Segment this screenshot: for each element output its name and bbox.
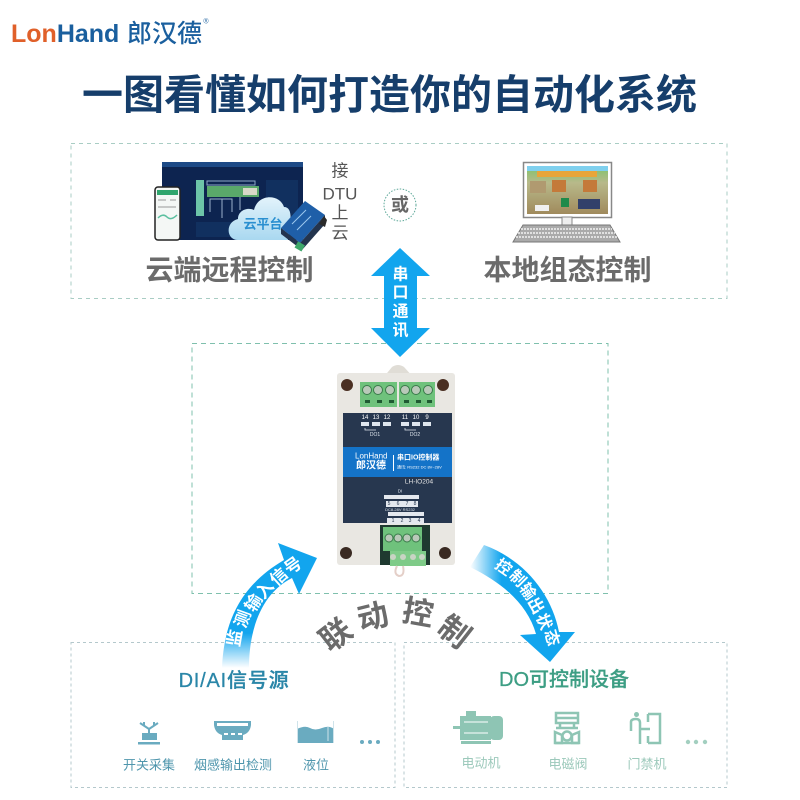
front panel: DI bbox=[398, 488, 402, 494]
bottom terminals bbox=[380, 525, 430, 576]
arrow: control output status: 态 bbox=[541, 628, 563, 648]
label: access control: 门禁机 bbox=[627, 756, 667, 772]
label: solenoid valve: 电磁阀 bbox=[548, 756, 588, 772]
front panel: LonHand bbox=[355, 452, 387, 460]
front panel: 9 bbox=[425, 415, 429, 421]
icon: cloud platform bbox=[155, 162, 327, 251]
arrow: control output status: 状 bbox=[532, 611, 555, 633]
more dots bbox=[686, 740, 707, 744]
label: motor: 电动机 bbox=[461, 756, 501, 770]
label: local control: 本地组态控制 bbox=[483, 254, 652, 286]
text: connect DTU to cloud bbox=[323, 162, 357, 242]
arrow: monitor input signal bbox=[222, 543, 317, 668]
arrow: monitor input signal: 监 bbox=[224, 628, 246, 648]
label: switch acquisition: 开关采集 bbox=[123, 758, 175, 772]
arrow: monitor input signal: 入 bbox=[252, 577, 278, 603]
front panel: 12 bbox=[384, 415, 391, 421]
arrow: control output status: 控 bbox=[492, 555, 516, 580]
front panel: 2 bbox=[401, 518, 404, 524]
label: smoke detector output: 烟感输出检测 bbox=[194, 758, 272, 772]
front panel: 8 bbox=[414, 501, 417, 507]
front panel: 6 bbox=[397, 501, 400, 507]
front panel: LH-IO204 bbox=[405, 478, 433, 486]
icon: solenoid valve bbox=[555, 713, 579, 743]
text: connect DTU to cloud: 云 bbox=[332, 224, 348, 242]
heading: controllable devices: DO可控制设备 bbox=[499, 668, 629, 691]
arrow: control output status bbox=[470, 545, 575, 662]
logo bbox=[11, 18, 209, 48]
label: cloud control: 云端远程控制 bbox=[145, 254, 314, 286]
heading: linked control: 制 bbox=[431, 609, 477, 655]
front panel: 7 bbox=[406, 501, 409, 507]
front panel: 13 bbox=[373, 415, 380, 421]
logo: ® bbox=[203, 18, 209, 26]
icon: access gate bbox=[631, 712, 660, 744]
arrow: control output status: 出 bbox=[524, 594, 547, 617]
front panel: 串口IO控制器 bbox=[397, 452, 439, 462]
heading: linked control: 联 bbox=[313, 612, 359, 658]
heading: signal sources: DI/AI信号源 bbox=[179, 669, 289, 692]
icon: motor bbox=[453, 711, 503, 744]
arrow: serial communication bbox=[371, 248, 430, 357]
badge: or bbox=[384, 189, 416, 221]
front panel: 郎汉德 bbox=[356, 458, 386, 472]
icon: switch acquisition bbox=[138, 722, 160, 744]
panel: controller frame bbox=[192, 344, 608, 594]
arrow: serial communication: 讯 bbox=[392, 322, 409, 340]
front panel: DO1 bbox=[370, 432, 380, 438]
front panel: 14 bbox=[362, 415, 369, 421]
top terminals bbox=[360, 382, 435, 407]
arrow: serial communication: 串 bbox=[392, 266, 409, 284]
arrow: control output status: 制 bbox=[505, 567, 529, 591]
front panel bbox=[343, 413, 452, 524]
device: serial IO controller bbox=[337, 365, 455, 576]
front panel: DO2 bbox=[410, 432, 420, 438]
panel: control options bbox=[71, 144, 727, 298]
badge: or: 或 bbox=[391, 194, 409, 215]
logo: LonHand bbox=[11, 20, 119, 48]
front panel: 10 bbox=[413, 415, 420, 421]
front panel: DC8-28V RS232 bbox=[385, 507, 416, 512]
icon: liquid level bbox=[297, 721, 334, 743]
front panel: 11 bbox=[402, 415, 409, 421]
panel: DO controllable devices bbox=[404, 642, 727, 788]
arrow: monitor input signal: 号 bbox=[281, 553, 305, 579]
heading: linked control: 控 bbox=[400, 593, 436, 633]
title: 一图看懂如何打造你的自动化系统 bbox=[82, 72, 697, 118]
arrow: control output status: 输 bbox=[515, 579, 540, 603]
arrow: monitor input signal: 输 bbox=[241, 590, 267, 615]
icon: smoke detector bbox=[214, 721, 251, 740]
front panel: 1 bbox=[392, 518, 395, 524]
heading: linked control bbox=[313, 593, 477, 658]
arrow: serial communication: 通 bbox=[392, 302, 409, 320]
icon: local computer bbox=[513, 162, 620, 242]
heading: linked control: 动 bbox=[354, 596, 392, 638]
logo: 郎汉德 bbox=[127, 20, 202, 48]
text: connect DTU to cloud: DTU bbox=[323, 184, 357, 204]
front panel: 3 bbox=[409, 518, 412, 524]
text: connect DTU to cloud: 上 bbox=[332, 204, 348, 222]
front panel: 4 bbox=[418, 518, 421, 524]
arrow: monitor input signal: 信 bbox=[266, 564, 292, 590]
arrow: serial communication: 口 bbox=[392, 284, 409, 302]
panel: DI/AI signal sources bbox=[71, 642, 395, 788]
front panel: 通讯: RS232 DC 8V~28V bbox=[397, 464, 442, 470]
front panel: 5 bbox=[388, 501, 391, 507]
more dots bbox=[360, 740, 380, 744]
text: connect DTU to cloud: 接 bbox=[332, 162, 348, 180]
icon: cloud platform: 云平台 bbox=[243, 216, 283, 232]
label: liquid level: 液位 bbox=[303, 758, 329, 772]
arrow: monitor input signal: 测 bbox=[231, 608, 255, 630]
